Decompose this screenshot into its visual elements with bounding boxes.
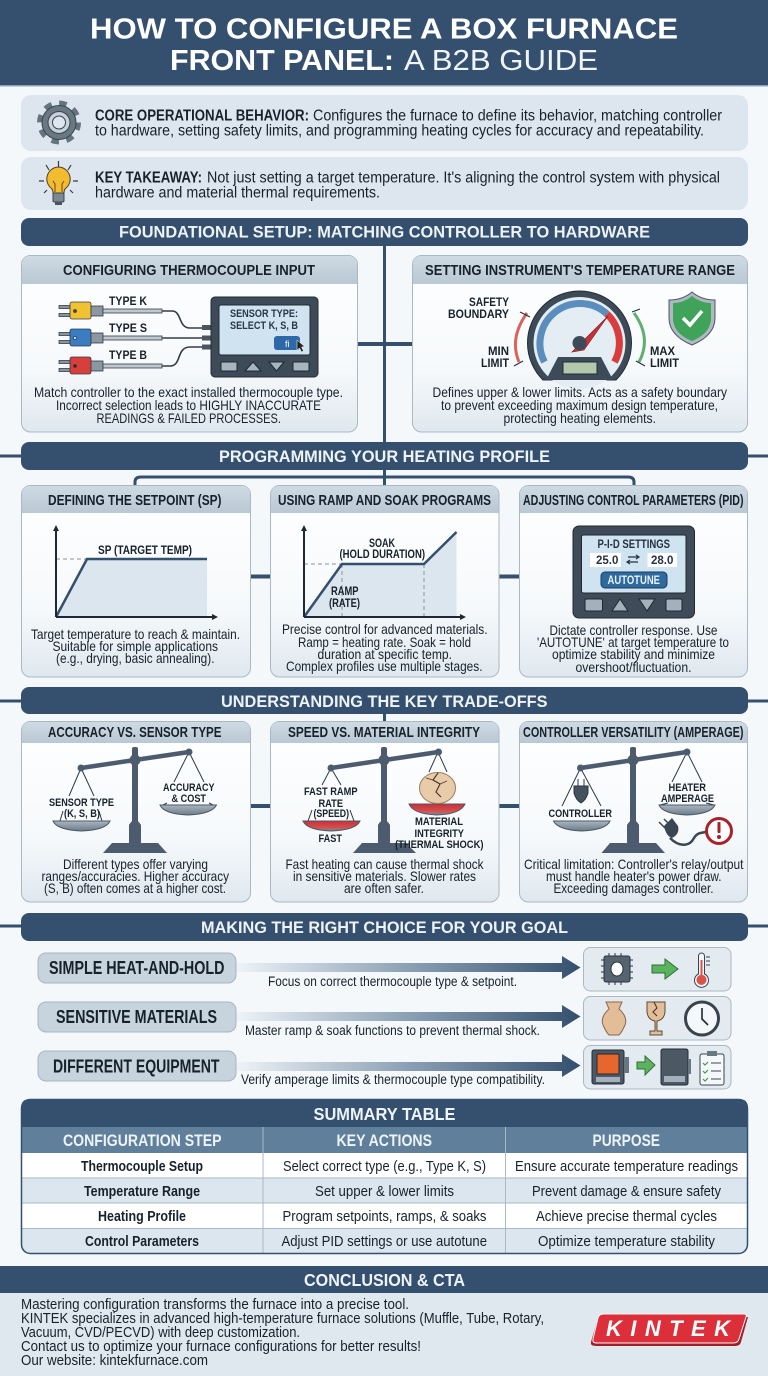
diagram: PID controller: P-I-D SETTINGS xyxy=(598,537,670,551)
setpoint description xyxy=(31,626,240,666)
ramp and soak description xyxy=(282,621,488,674)
scale diagram: ACCURACY xyxy=(163,782,215,794)
heading: foundational setup xyxy=(21,218,748,246)
conclusion text: Vacuum, CVD/PECVD) with deep customization. xyxy=(21,1325,300,1341)
core behavior text: Configures the furnace to define its behavior, matching controller xyxy=(313,108,722,124)
table row 3 xyxy=(21,1203,748,1228)
table row 3: Heating Profile xyxy=(98,1208,186,1225)
panel: PID control parameters xyxy=(520,486,748,677)
speed description: are often safer. xyxy=(344,880,424,896)
heading: making the right choice xyxy=(21,913,748,941)
PID description: 'AUTOTUNE' at target temperature to xyxy=(537,634,729,650)
ramp and soak description: Complex profiles use multiple stages. xyxy=(286,658,482,674)
ramp and soak description: duration at specific temp. xyxy=(318,646,452,662)
table row 4 xyxy=(21,1228,748,1254)
ramp and soak description: Precise control for advanced materials. xyxy=(282,621,488,637)
scale diagram with cracked egg: (THERMAL SHOCK) xyxy=(395,839,484,851)
conclusion heading: CONCLUSION & CTA xyxy=(304,1270,465,1290)
key takeaway text: hardware and material thermal requirements. xyxy=(95,184,380,202)
separator xyxy=(28,1098,741,1100)
goal label: SENSITIVE MATERIALS xyxy=(56,1007,217,1027)
scale diagram: & COST xyxy=(172,793,206,805)
table header row: KEY ACTIONS xyxy=(336,1131,432,1150)
heading: understanding the key trade-offs: UNDERSTANDING THE KEY TRADE-OFFS xyxy=(221,692,548,711)
summary table xyxy=(21,1099,748,1254)
table row 1 xyxy=(21,1153,748,1178)
accuracy description: (S, B) often comes at a higher cost. xyxy=(44,880,226,896)
core behavior text: CORE OPERATIONAL BEHAVIOR: xyxy=(95,108,309,124)
table header row: CONFIGURATION STEP xyxy=(63,1131,222,1150)
panel: core operational behavior xyxy=(21,95,748,151)
goal description: Focus on correct thermocouple type & setpoint. xyxy=(268,974,517,989)
scale diagram with plug: CONTROLLER xyxy=(548,808,612,820)
goal description: Master ramp & soak functions to prevent thermal shock. xyxy=(245,1023,540,1038)
scale diagram with cracked egg xyxy=(303,747,484,853)
scale diagram with cracked egg: RATE xyxy=(318,798,343,810)
PID description xyxy=(537,622,729,675)
goal label: DIFFERENT EQUIPMENT xyxy=(53,1056,220,1076)
amperage description: must handle heater's power draw. xyxy=(546,868,722,884)
panel: accuracy vs sensor type xyxy=(22,722,250,902)
panel title: DEFINING THE SETPOINT (SP) xyxy=(48,492,222,509)
core behavior text xyxy=(95,108,722,140)
speed description: in sensitive materials. Slower rates xyxy=(293,868,476,884)
range description: protecting heating elements. xyxy=(504,410,656,426)
chart: ramp and soak profile: (HOLD DURATION) xyxy=(340,547,425,561)
diagram: controller: fi xyxy=(285,339,290,349)
diagram: thermocouple probes xyxy=(59,302,202,374)
heading: understanding the key trade-offs xyxy=(21,687,748,714)
icons: chip, arrow, thermometer xyxy=(584,948,731,991)
amperage description: Exceeding damages controller. xyxy=(554,880,714,896)
gauge labels: LIMIT xyxy=(481,356,510,370)
probe labels: TYPE K xyxy=(109,294,147,308)
conclusion text: Mastering configuration transforms the furnace into a precise tool. xyxy=(21,1297,409,1313)
gauge labels xyxy=(448,295,680,370)
panel: configuring thermocouple input xyxy=(22,256,358,432)
goal row: different equipment xyxy=(38,1046,731,1089)
panel: defining the setpoint xyxy=(22,486,250,677)
title banner: FRONT PANEL: xyxy=(170,45,394,77)
setpoint description: Target temperature to reach & maintain. xyxy=(31,626,240,642)
core behavior text: to hardware, setting safety limits, and programming heating cycles for accuracy and repeatability. xyxy=(95,122,704,140)
panel: controller versatility xyxy=(520,722,748,902)
panel title: SPEED VS. MATERIAL INTEGRITY xyxy=(288,724,480,741)
diagram: controller: SENSOR TYPE: xyxy=(230,308,298,320)
logo: KINTEK xyxy=(591,1314,748,1346)
gauge labels: BOUNDARY xyxy=(448,307,509,321)
PID description: optimize stability and minimize xyxy=(552,646,715,662)
goal row: sensitive materials xyxy=(38,996,731,1040)
table row 4: Optimize temperature stability xyxy=(538,1233,715,1250)
table row 2: Prevent damage & ensure safety xyxy=(532,1183,721,1200)
key takeaway text: KEY TAKEAWAY: xyxy=(95,170,202,186)
speed description xyxy=(286,856,484,896)
table row 2: Set upper & lower limits xyxy=(315,1183,454,1200)
table row 3: Program setpoints, ramps, & soaks xyxy=(282,1208,486,1225)
diagram: PID controller xyxy=(573,526,694,618)
icon: gear xyxy=(40,104,78,142)
scale diagram with cracked egg: FAST xyxy=(318,833,342,845)
panel: temperature range xyxy=(412,256,748,432)
title banner: A B2B GUIDE xyxy=(404,45,598,77)
range description: to prevent exceeding maximum design temperature, xyxy=(441,397,718,413)
chart: ramp and soak profile: SOAK xyxy=(369,536,395,550)
icon: plug and warning xyxy=(659,818,732,845)
scale diagram with cracked egg: FAST RAMP xyxy=(304,786,358,798)
arrow xyxy=(236,1005,580,1028)
conclusion heading xyxy=(0,1266,768,1293)
goal label xyxy=(38,1051,236,1081)
scale diagram with plug: AMPERAGE xyxy=(661,793,714,805)
chart: setpoint profile: SP (TARGET TEMP) xyxy=(98,543,192,557)
icon: shield xyxy=(669,292,715,345)
chart: ramp and soak profile xyxy=(301,525,466,620)
probe labels: TYPE B xyxy=(109,348,147,362)
table row 1: Ensure accurate temperature readings xyxy=(515,1158,738,1175)
heading: foundational setup: FOUNDATIONAL SETUP: MATCHING CONTROLLER TO HARDWARE xyxy=(119,222,650,242)
icons: furnace, arrow, cabinet, checklist xyxy=(584,1046,731,1089)
diagram: controller xyxy=(202,297,318,377)
scale diagram with plug xyxy=(548,747,732,853)
range description xyxy=(432,384,727,426)
setpoint description: Suitable for simple applications xyxy=(52,638,218,654)
scale diagram: (K, S, B) xyxy=(64,808,100,820)
accuracy description xyxy=(42,856,229,896)
table row 4: Control Parameters xyxy=(85,1233,199,1250)
conclusion text: Contact us to optimize your furnace configurations for better results! xyxy=(21,1339,421,1355)
scale diagram: SENSOR TYPE xyxy=(49,797,114,809)
accuracy description: ranges/accuracies. Higher accuracy xyxy=(42,868,229,884)
diagram: PID controller: 25.0 xyxy=(596,555,618,567)
goal description: Verify amperage limits & thermocouple type compatibility. xyxy=(241,1072,545,1087)
table row 1: Thermocouple Setup xyxy=(81,1158,203,1175)
heading: programming your heating profile: PROGRAMMING YOUR HEATING PROFILE xyxy=(219,447,550,466)
limit arcs xyxy=(514,309,645,366)
range description: Defines upper & lower limits. Acts as a safety boundary xyxy=(432,384,727,400)
gauge xyxy=(528,291,632,389)
panel: ramp and soak xyxy=(270,486,499,677)
probe labels: TYPE S xyxy=(109,321,147,335)
gauge labels: MIN xyxy=(488,344,509,358)
panel title: CONFIGURING THERMOCOUPLE INPUT xyxy=(63,262,315,279)
diagram: PID controller: 28.0 xyxy=(651,555,673,567)
panel: speed vs material integrity xyxy=(270,722,499,902)
panel title: ACCURACY VS. SENSOR TYPE xyxy=(48,724,222,741)
speed description: Fast heating can cause thermal shock xyxy=(286,856,484,872)
amperage description xyxy=(524,856,744,896)
arrow xyxy=(236,956,580,979)
arrow xyxy=(236,1054,580,1077)
heading: programming your heating profile xyxy=(21,442,748,470)
panel: key takeaway xyxy=(21,157,748,210)
chart: setpoint profile xyxy=(53,525,218,620)
logo: KINTEK: KINTEK xyxy=(606,1316,732,1341)
scale diagram with cracked egg: MATERIAL xyxy=(415,816,463,828)
heading: making the right choice: MAKING THE RIGHT CHOICE FOR YOUR GOAL xyxy=(201,918,568,937)
table header row xyxy=(21,1127,748,1153)
scale diagram with cracked egg: (SPEED) xyxy=(314,808,349,820)
table row 3: Achieve precise thermal cycles xyxy=(536,1208,717,1225)
table row 2: Temperature Range xyxy=(84,1183,200,1200)
setpoint description: (e.g., drying, basic annealing). xyxy=(56,650,214,666)
thermocouple description xyxy=(34,384,343,426)
scale diagram with cracked egg: INTEGRITY xyxy=(414,828,465,840)
icons: vase, cracked glass, clock xyxy=(584,996,731,1040)
conclusion text xyxy=(21,1297,544,1369)
gauge labels: SAFETY xyxy=(469,295,509,309)
PID description: overshoot/fluctuation. xyxy=(576,659,692,675)
table header row: PURPOSE xyxy=(592,1131,660,1150)
icon: light bulb xyxy=(39,161,78,205)
goal row: simple heat-and-hold xyxy=(38,948,731,991)
thermocouple description: Incorrect selection leads to HIGHLY INACCURATE xyxy=(56,397,321,413)
key takeaway text: Not just setting a target temperature. It's aligning the control system with physical xyxy=(207,170,720,186)
connecting lines xyxy=(0,246,768,926)
table row 2 xyxy=(21,1178,748,1203)
accuracy description: Different types offer varying xyxy=(63,856,208,872)
diagram: PID controller: AUTOTUNE xyxy=(608,573,660,587)
scale diagram xyxy=(49,747,216,853)
table title: SUMMARY TABLE xyxy=(314,1104,456,1124)
PID description: Dictate controller response. Use xyxy=(550,622,718,638)
gauge labels: LIMIT xyxy=(650,356,680,370)
goal label xyxy=(38,1002,236,1032)
ramp and soak description: Ramp = heating rate. Soak = hold xyxy=(298,634,471,650)
conclusion text: Our website: kintekfurnace.com xyxy=(21,1353,208,1369)
table title xyxy=(21,1099,748,1127)
scale diagram with plug: HEATER xyxy=(668,782,706,794)
probe labels xyxy=(109,294,147,362)
goal label: SIMPLE HEAT-AND-HOLD xyxy=(49,958,224,978)
conclusion text: KINTEK specializes in advanced high-temperature furnace solutions (Muffle, Tube, Rotary, xyxy=(21,1311,544,1327)
chart: ramp and soak profile: RAMP xyxy=(331,584,358,598)
title banner xyxy=(0,0,768,86)
key takeaway text xyxy=(95,170,720,202)
title banner: HOW TO CONFIGURE A BOX FURNACE xyxy=(90,14,678,46)
panel title: USING RAMP AND SOAK PROGRAMS xyxy=(278,492,491,509)
conclusion section xyxy=(0,1266,768,1376)
chart: ramp and soak profile: (RATE) xyxy=(329,596,360,610)
gauge labels: MAX xyxy=(650,344,675,358)
thermocouple description: READINGS & FAILED PROCESSES. xyxy=(96,410,281,426)
diagram: controller: SELECT K, S, B xyxy=(230,320,298,332)
table row 4: Adjust PID settings or use autotune xyxy=(282,1233,487,1250)
thermocouple description: Match controller to the exact installed thermocouple type. xyxy=(34,384,343,400)
table row 1: Select correct type (e.g., Type K, S) xyxy=(283,1158,486,1175)
goal label xyxy=(38,953,236,983)
